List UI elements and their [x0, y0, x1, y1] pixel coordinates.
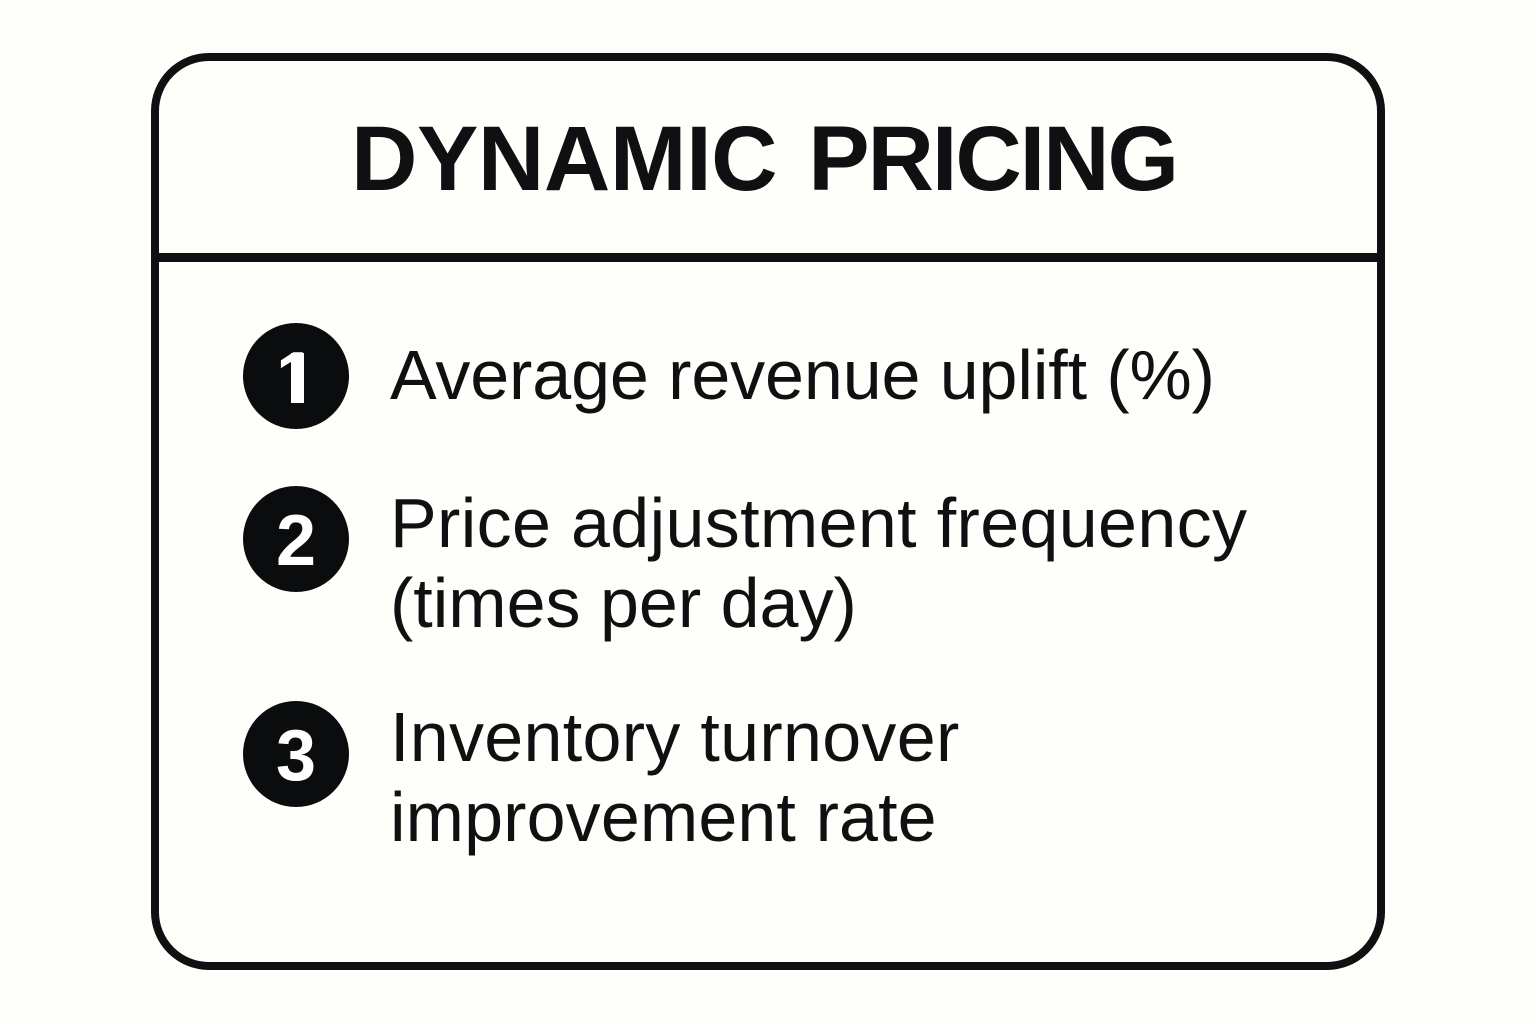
title: DYNAMIC PRICING — [351, 108, 1177, 210]
icon: number 3 — [243, 701, 349, 807]
text: item 2: (times per day) — [390, 564, 857, 642]
text: item 3: improvement rate — [390, 778, 937, 856]
text: item 3 — [390, 698, 960, 856]
text: item 3: Inventory turnover — [390, 698, 960, 776]
icon: number 1 — [243, 323, 349, 429]
icon: number 2 — [243, 486, 349, 592]
icon: number 2: 2 — [276, 501, 316, 581]
icon: number 1: 1 — [276, 338, 316, 418]
panel: card outline — [151, 53, 1385, 970]
text: item 2 — [390, 484, 1247, 642]
icon: number 3: 3 — [276, 716, 316, 796]
header divider — [155, 253, 1381, 262]
text: item 2: Price adjustment frequency — [390, 484, 1247, 562]
text: item 1: Average revenue uplift (%) — [390, 336, 1215, 414]
